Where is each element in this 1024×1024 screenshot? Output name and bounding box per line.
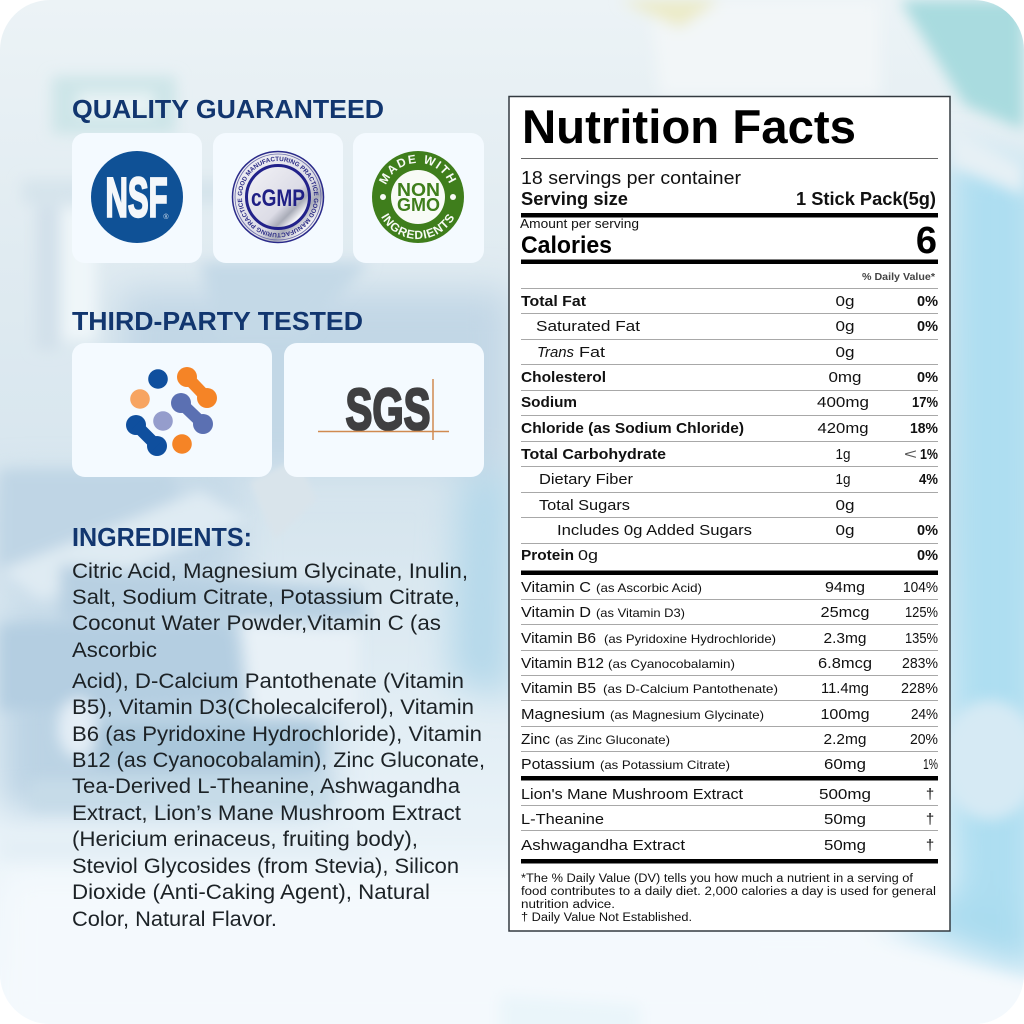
vitamins and minerals table: 100mg xyxy=(820,706,870,723)
ingredients list: Tea-Derived L-Theanine, Ashwagandha xyxy=(72,775,460,798)
main nutrients table: 0% xyxy=(917,293,938,310)
botanical extracts table: 50mg xyxy=(824,811,866,828)
vitamins and minerals table: 135% xyxy=(905,630,938,647)
vitamins and minerals table: 2.2mg xyxy=(824,731,866,748)
calories: Calories xyxy=(521,232,612,259)
calories xyxy=(520,216,937,262)
botanical extracts table: † xyxy=(926,811,934,828)
footnote: *The % Daily Value (DV) tells you how much a nutrient in a serving of xyxy=(521,873,914,885)
main nutrients table: 0% xyxy=(917,547,938,564)
vitamins and minerals table: (as Potassium Citrate) xyxy=(600,758,730,772)
heading: third-party tested: THIRD-PARTY TESTED xyxy=(72,306,363,336)
vitamins and minerals table: Zinc xyxy=(521,731,551,748)
vitamins and minerals table: (as Ascorbic Acid) xyxy=(596,581,702,595)
main nutrients table: 1g xyxy=(836,471,850,488)
vitamins and minerals table: (as Vitamin D3) xyxy=(596,606,685,620)
heading: quality guaranteed: QUALITY GUARANTEED xyxy=(72,94,384,124)
ingredients list: Citric Acid, Magnesium Glycinate, Inulin, xyxy=(72,560,468,583)
main nutrients table: 0mg xyxy=(828,369,862,386)
vitamins and minerals table: 228% xyxy=(901,680,938,697)
main nutrients table: 0g xyxy=(836,522,854,539)
main nutrients table: Trans xyxy=(537,344,574,361)
main nutrients table: 0g xyxy=(836,497,854,514)
main nutrients table: Includes 0g Added Sugars xyxy=(557,522,752,539)
botanical extracts table: Lion's Mane Mushroom Extract xyxy=(521,786,744,803)
main nutrients table: 0g xyxy=(836,318,854,335)
card: non-GMO badge: INGREDIENTS xyxy=(381,213,454,240)
main nutrients table: Fat xyxy=(579,344,606,361)
card: non-GMO badge: NON xyxy=(397,180,440,200)
main nutrients table: 18% xyxy=(910,420,938,437)
main nutrients table: < xyxy=(904,446,917,463)
main nutrients table: 0g xyxy=(836,344,854,361)
botanical extracts table: 50mg xyxy=(824,837,866,854)
vitamins and minerals table: Vitamin B5 xyxy=(521,680,596,697)
main nutrients table: 4% xyxy=(919,471,938,488)
botanical extracts table: 500mg xyxy=(819,786,871,803)
card: non-GMO badge xyxy=(353,133,484,263)
vitamins and minerals table: 60mg xyxy=(824,756,866,773)
vitamins and minerals table: 20% xyxy=(910,731,938,748)
ingredients list: Extract, Lion’s Mane Mushroom Extract xyxy=(72,802,461,825)
main nutrients table: 1% xyxy=(920,446,938,463)
vitamins and minerals table: Vitamin D xyxy=(521,604,591,621)
ingredients list: Steviol Glycosides (from Stevia), Silicon xyxy=(72,855,459,878)
card: cGMP badge: GOOD MANUFACTURING PRACTICE xyxy=(238,198,318,238)
main nutrients table: 17% xyxy=(912,394,938,411)
card: cGMP badge xyxy=(213,133,343,263)
card: cGMP badge: cGMP xyxy=(251,185,305,212)
ingredients list: Salt, Sodium Citrate, Potassium Citrate, xyxy=(72,586,460,609)
ingredients list: Color, Natural Flavor. xyxy=(72,908,277,931)
card: NSF badge xyxy=(72,133,202,263)
main nutrients table: Total Carbohydrate xyxy=(521,446,666,463)
vitamins and minerals table: 2.3mg xyxy=(824,630,866,647)
vitamins and minerals table: 94mg xyxy=(825,579,865,596)
vitamins and minerals table: 125% xyxy=(905,604,938,621)
card: non-GMO badge: GMO xyxy=(397,195,440,215)
main nutrients table: Chloride (as Sodium Chloride) xyxy=(521,420,744,437)
botanical extracts table: † xyxy=(926,837,934,854)
vitamins and minerals table: (as Magnesium Glycinate) xyxy=(610,708,764,722)
ingredients list: Acid), D-Calcium Pantothenate (Vitamin xyxy=(72,670,464,693)
botanical extracts table xyxy=(521,786,938,854)
botanical extracts table: L-Theanine xyxy=(521,811,604,828)
vitamins and minerals table: (as Cyanocobalamin) xyxy=(608,657,735,671)
main nutrients table: 1g xyxy=(836,446,850,463)
calories: Amount per serving xyxy=(520,216,639,231)
vitamins and minerals table: Vitamin B6 xyxy=(521,630,596,647)
vitamins and minerals table: (as D-Calcium Pantothenate) xyxy=(603,682,778,696)
footnote: food contributes to a daily diet. 2,000 calories a day is used for general xyxy=(521,886,936,898)
vitamins and minerals table: 11.4mg xyxy=(821,680,869,697)
footnote: nutrition advice. xyxy=(521,899,615,911)
nutrition facts title: Nutrition Facts xyxy=(522,100,856,153)
vitamins and minerals table: 24% xyxy=(911,706,938,723)
card: NSF badge: NSF xyxy=(106,166,168,228)
vitamins and minerals table: 283% xyxy=(902,655,938,672)
main nutrients table: 0% xyxy=(917,522,938,539)
main nutrients table xyxy=(521,288,938,564)
calories: 6 xyxy=(916,220,937,262)
main nutrients table: 420mg xyxy=(818,420,868,437)
main nutrients table: 0% xyxy=(917,369,938,386)
ingredients list: B6 (as Pyridoxine Hydrochloride), Vitamin xyxy=(72,723,482,746)
main nutrients table: Sodium xyxy=(521,394,577,411)
main nutrients table: Total Sugars xyxy=(539,497,630,514)
main nutrients table: 0g xyxy=(836,293,854,310)
card: SGS logo: SGS xyxy=(346,378,430,442)
card: non-GMO badge: MADE WITH xyxy=(378,154,456,184)
heading: ingredients: INGREDIENTS: xyxy=(72,522,252,552)
main nutrients table: 0g xyxy=(578,547,598,564)
card: NSF badge: ® xyxy=(163,213,169,221)
daily value header: % Daily Value* xyxy=(862,272,935,283)
card: cGMP badge: GOOD MANUFACTURING PRACTICE xyxy=(238,156,318,196)
main nutrients table: Dietary Fiber xyxy=(539,471,633,488)
vitamins and minerals table: 25mcg xyxy=(820,604,870,621)
ingredients list: B5), Vitamin D3(Cholecalciferol), Vitamin xyxy=(72,696,474,719)
vitamins and minerals table: (as Zinc Gluconate) xyxy=(555,733,670,747)
serving information xyxy=(521,168,936,209)
vitamins and minerals table: 104% xyxy=(903,579,938,596)
main nutrients table: Total Fat xyxy=(521,293,586,310)
vitamins and minerals table: 6.8mcg xyxy=(818,655,872,672)
card: molecule logo xyxy=(72,343,272,477)
vitamins and minerals table: 1% xyxy=(923,756,938,773)
ingredients list: (Hericium erinaceus, fruiting body), xyxy=(72,828,418,851)
vitamins and minerals table: (as Pyridoxine Hydrochloride) xyxy=(604,632,776,646)
vitamins and minerals table: Magnesium xyxy=(521,706,605,723)
vitamins and minerals table: Potassium xyxy=(521,756,595,773)
botanical extracts table: † xyxy=(926,786,934,803)
serving information: Serving size xyxy=(521,189,628,209)
botanical extracts table: Ashwagandha Extract xyxy=(521,837,686,854)
main nutrients table: 400mg xyxy=(817,394,869,411)
serving information: 1 Stick Pack(5g) xyxy=(796,189,936,209)
main nutrients table: Protein xyxy=(521,547,574,564)
footnote xyxy=(521,873,936,924)
card: SGS logo xyxy=(284,343,484,477)
ingredients list: B12 (as Cyanocobalamin), Zinc Gluconate, xyxy=(72,749,485,772)
ingredients list xyxy=(72,560,485,931)
ingredients list: Coconut Water Powder,Vitamin C (as xyxy=(72,612,441,635)
panel: nutrition facts label xyxy=(509,96,950,931)
vitamins and minerals table: Vitamin B12 xyxy=(521,655,604,672)
serving information: 18 servings per container xyxy=(521,168,741,188)
main nutrients table: Cholesterol xyxy=(521,369,606,386)
vitamins and minerals table: Vitamin C xyxy=(521,579,591,596)
ingredients list: Dioxide (Anti-Caking Agent), Natural xyxy=(72,881,430,904)
main nutrients table: Saturated Fat xyxy=(536,318,641,335)
main nutrients table: 0% xyxy=(917,318,938,335)
footnote: † Daily Value Not Established. xyxy=(521,912,692,924)
vitamins and minerals table xyxy=(521,579,938,773)
ingredients list: Ascorbic xyxy=(72,639,157,662)
